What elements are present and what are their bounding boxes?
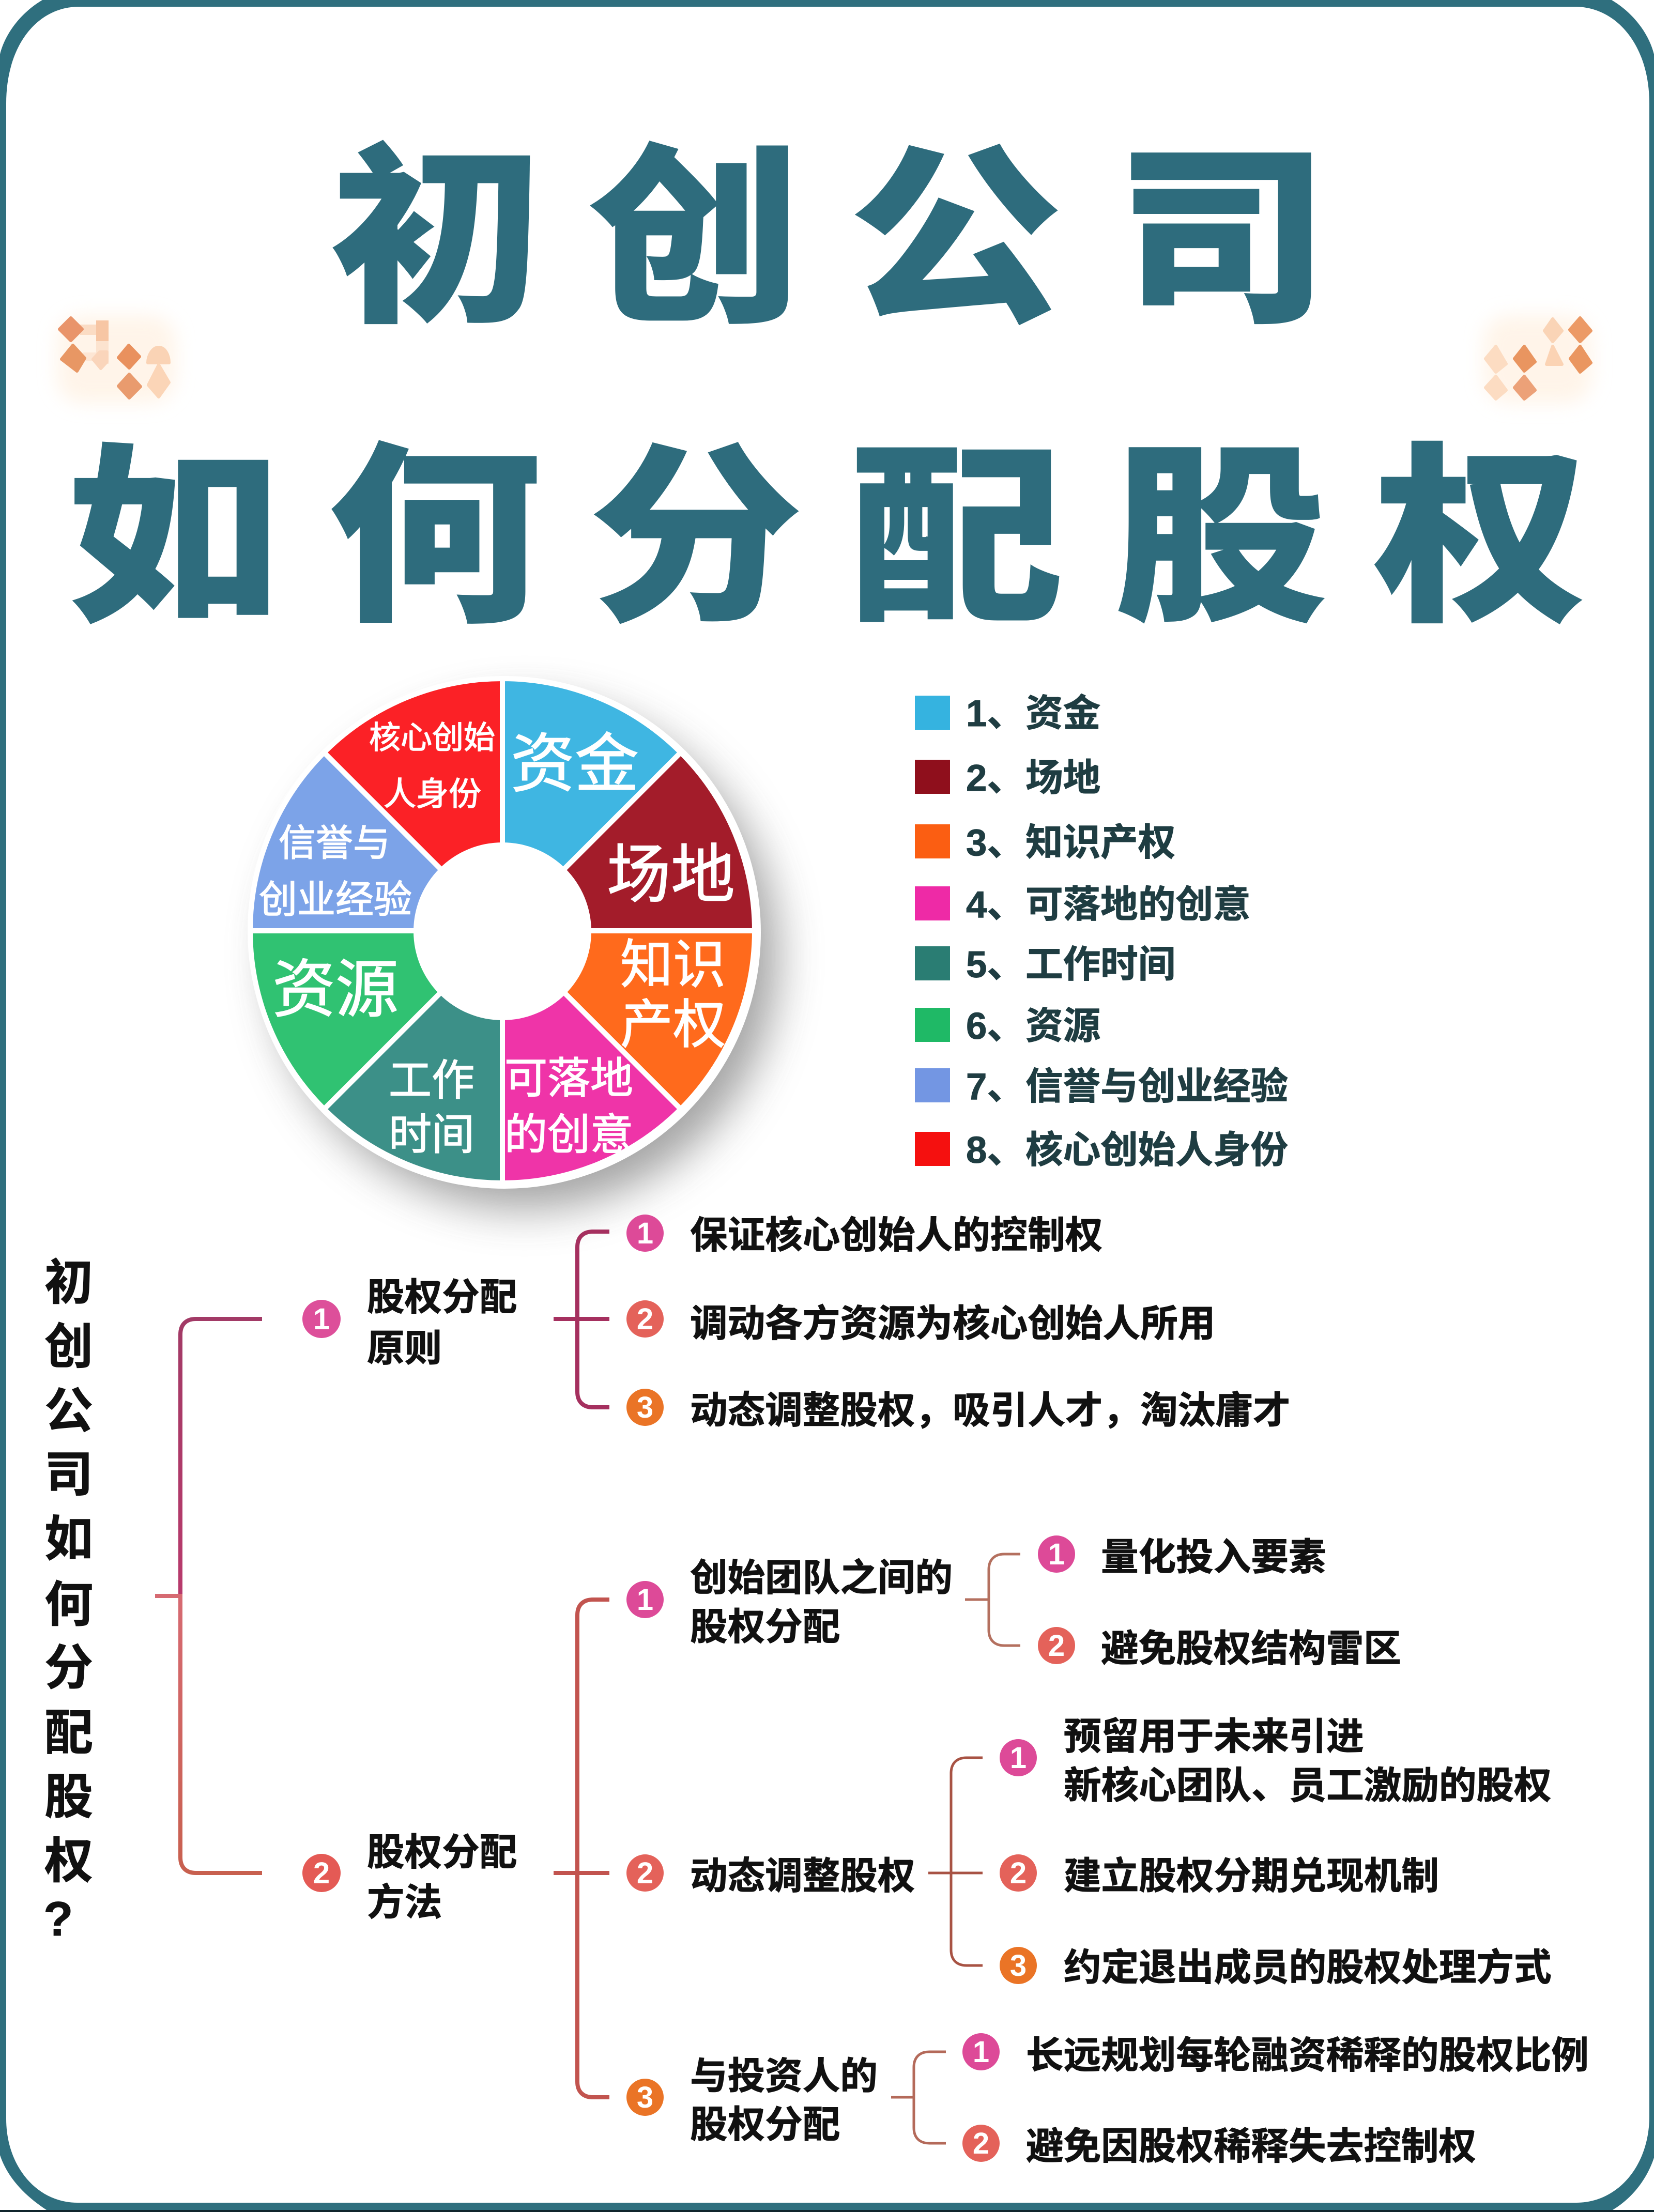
- main bracket: [155, 1319, 262, 1873]
- method 2: dynamic adjustment: 3: [1010, 1949, 1027, 1983]
- pie chart: equity factors: [248, 676, 778, 1209]
- legend: 可落地的创意: [1025, 884, 1251, 926]
- method 2: dynamic adjustment: 2: [1010, 1856, 1027, 1890]
- branch 1: principles: 股权分配: [367, 1277, 517, 1318]
- ornament: left: [57, 315, 176, 403]
- legend: 信誉与创业经验: [1025, 1066, 1288, 1108]
- legend: 2、: [966, 757, 1024, 799]
- method 3: investors: 长远规划每轮融资稀释的股权比例: [1026, 2035, 1589, 2077]
- method 2: dynamic adjustment: 动态调整股权: [690, 1855, 915, 1897]
- method 2: dynamic adjustment: 建立股权分期兑现机制: [1064, 1855, 1439, 1897]
- vertical heading: 股: [44, 1770, 93, 1824]
- legend: 4、: [966, 884, 1024, 926]
- vertical heading: 何: [44, 1577, 93, 1632]
- method 1: founders: 创始团队之间的: [690, 1557, 953, 1599]
- legend: 资源: [1025, 1005, 1100, 1047]
- pie chart: equity factors: 人身份: [384, 776, 481, 812]
- pie chart: equity factors: 可落地: [504, 1054, 633, 1102]
- vertical heading: [43, 1255, 93, 1946]
- legend: 5、: [966, 944, 1024, 986]
- pie chart: equity factors: 创业经验: [259, 878, 412, 921]
- pie chart: equity factors: 的创意: [504, 1111, 633, 1159]
- legend: 知识产权: [1025, 822, 1175, 864]
- ornament: right: [1483, 315, 1592, 403]
- method 3: investors: 2: [973, 2127, 989, 2160]
- method 1: founders: 1: [637, 1583, 653, 1617]
- vertical heading: 如: [44, 1512, 93, 1566]
- method 2: dynamic adjustment: 预留用于未来引进: [1064, 1716, 1364, 1758]
- pie chart: equity factors: 时间: [389, 1111, 474, 1159]
- branch 1: principles: 1: [313, 1302, 330, 1336]
- branch 1: principles: 3: [637, 1391, 653, 1424]
- legend: 8、: [966, 1129, 1024, 1171]
- legend: 1、: [966, 693, 1024, 734]
- legend: 工作时间: [1025, 944, 1175, 986]
- legend: 核心创始人身份: [1025, 1129, 1288, 1171]
- title: 如何分配股权: [68, 432, 1587, 645]
- legend: 6、: [966, 1005, 1024, 1047]
- method 2: dynamic adjustment: 2: [637, 1856, 653, 1890]
- branch 2: methods: 股权分配: [367, 1832, 517, 1873]
- title: [68, 132, 1587, 645]
- method 3: investors: 避免因股权稀释失去控制权: [1026, 2126, 1476, 2168]
- method 1: founders: 量化投入要素: [1101, 1537, 1326, 1578]
- vertical heading: ?: [43, 1892, 73, 1946]
- legend: 场地: [1025, 757, 1100, 799]
- method 3: investors: 1: [973, 2035, 989, 2069]
- vertical heading: 初: [44, 1255, 93, 1310]
- method 2: dynamic adjustment: 1: [1010, 1741, 1027, 1775]
- method 1: founders: 2: [1048, 1629, 1065, 1663]
- pie chart: equity factors: 场地: [607, 839, 735, 911]
- pie chart: equity factors: 信誉与: [279, 823, 390, 864]
- vertical heading: 权: [44, 1834, 93, 1888]
- method 1: founders: 1: [1048, 1538, 1065, 1571]
- branch 1: principles: 2: [637, 1302, 653, 1336]
- legend: [915, 693, 1288, 1171]
- branch 1: principles: 动态调整股权，吸引人才，淘汰庸才: [690, 1390, 1290, 1432]
- legend: 资金: [1025, 693, 1100, 734]
- pie chart: equity factors: 知识: [620, 935, 726, 994]
- branch 2: methods: [302, 1535, 1589, 2168]
- method 2: dynamic adjustment: 约定退出成员的股权处理方式: [1064, 1947, 1552, 1989]
- branch 2: methods: 2: [313, 1856, 330, 1890]
- pie chart: equity factors: 工作: [389, 1056, 474, 1104]
- method 3: investors: 3: [637, 2081, 653, 2114]
- method 1: founders: 股权分配: [690, 1606, 840, 1648]
- legend: 7、: [966, 1066, 1024, 1108]
- legend: 3、: [966, 822, 1024, 864]
- branch 1: principles: 1: [637, 1217, 653, 1250]
- pie chart: equity factors: 产权: [620, 995, 726, 1054]
- pie chart: equity factors: 核心创始: [369, 720, 495, 755]
- pie chart: equity factors: 资源: [272, 955, 399, 1025]
- vertical heading: 公: [44, 1384, 93, 1438]
- pie chart: equity factors: 资金: [511, 729, 639, 800]
- vertical heading: 分: [44, 1640, 93, 1695]
- method 2: dynamic adjustment: [626, 1716, 1552, 1989]
- branch 1: principles: 保证核心创始人的控制权: [690, 1215, 1103, 1256]
- method 2: dynamic adjustment: 新核心团队、员工激励的股权: [1064, 1765, 1552, 1807]
- vertical heading: 创: [44, 1319, 93, 1374]
- branch 1: principles: 原则: [367, 1328, 442, 1370]
- branch 1: principles: 调动各方资源为核心创始人所用: [690, 1303, 1215, 1345]
- branch 2: methods: 方法: [367, 1882, 442, 1924]
- method 3: investors: 与投资人的: [690, 2055, 878, 2097]
- title: 初创公司: [330, 132, 1329, 346]
- method 3: investors: 股权分配: [690, 2104, 840, 2146]
- method 1: founders: 避免股权结构雷区: [1101, 1628, 1401, 1670]
- branch 1: principles: [302, 1215, 1290, 1432]
- method 3: investors: [626, 2033, 1589, 2168]
- vertical heading: 司: [44, 1447, 93, 1501]
- vertical heading: 配: [44, 1706, 93, 1760]
- method 1: founders: [626, 1535, 1401, 1670]
